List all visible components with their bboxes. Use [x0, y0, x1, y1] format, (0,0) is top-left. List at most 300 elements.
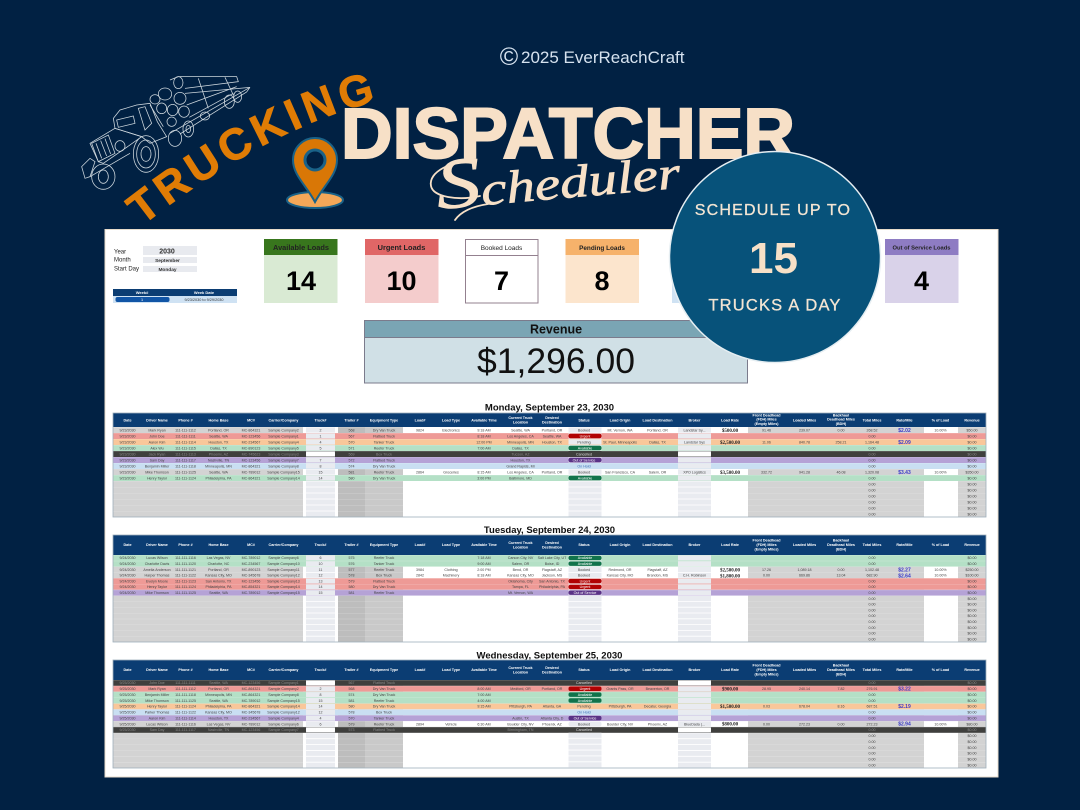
table: Tuesday schedule: Clothing [444, 568, 458, 572]
KPI card: out of service loads: Out of Service Loads [893, 246, 950, 252]
table: Monday schedule: Groceries [443, 470, 459, 474]
table: Monday schedule: Dry Van Truck [373, 464, 395, 468]
table: Tuesday schedule: Las Vegas, NV [207, 556, 231, 560]
table: Monday schedule: Benjamin Miller [145, 464, 170, 468]
table: Monday schedule: Tucson, AZ [511, 452, 530, 456]
table: Wednesday schedule: Vehicle [445, 722, 457, 726]
KPI card: available loads: 14 [286, 266, 316, 296]
table: Monday schedule: Total Miles [863, 418, 881, 422]
table: Wednesday schedule: Sample Company8 [268, 693, 299, 697]
table: Tuesday schedule: 15 [318, 591, 322, 595]
table: Wednesday schedule: Flatbed Truck [373, 728, 395, 732]
table: Monday schedule: $2,500.00 [720, 441, 740, 446]
table: Wednesday schedule: Grants Pass, OR [606, 687, 634, 691]
table: Monday schedule: 10.00% [934, 428, 947, 432]
table: Wednesday schedule: Portland, OR [542, 687, 563, 691]
table: Wednesday schedule: Parker Thomas [145, 711, 169, 715]
table: Tuesday schedule: 111-111-1121 [175, 568, 196, 572]
table: Wednesday schedule: Houston, TX [209, 716, 229, 720]
table: Monday schedule: MC-864321 [242, 476, 260, 480]
table: Wednesday schedule: 8:00 AM [477, 687, 491, 691]
table: Wednesday schedule: Sam Day [150, 728, 165, 732]
table: Wednesday schedule: 276.91 [866, 687, 878, 691]
table: Monday schedule: Rate/Mile [896, 418, 913, 422]
table: Monday schedule: 111-111-1114 [175, 440, 196, 444]
table: Tuesday schedule: $0.00 [968, 562, 976, 566]
table: Monday schedule: 111-111-1113 [175, 452, 196, 456]
table: Wednesday schedule: 4:00 AM [477, 699, 491, 703]
table: Wednesday schedule: Dry Van Truck [373, 687, 395, 691]
table: Monday schedule: 9:18 AM [477, 428, 491, 432]
heading: Scheduler script [431, 124, 684, 225]
table: Wednesday schedule: 0.03 [763, 705, 770, 709]
table: Wednesday schedule: $0.00 [968, 681, 976, 685]
table: Wednesday schedule: Total Miles [863, 668, 881, 672]
table: Tuesday schedule: Rate/Mile [896, 543, 913, 547]
table: Monday schedule: 0.00 [868, 452, 876, 456]
callout: schedule up to 15 trucks a day: SCHEDULE UP TO [695, 202, 851, 219]
table: Wednesday schedule: 0.00 [838, 722, 844, 726]
table: Monday schedule: 9/23/2030 [120, 458, 136, 462]
table: Monday schedule: $0.00 [968, 452, 976, 456]
table: Wednesday schedule: 0.00 [868, 763, 876, 767]
panel: date controls: September [155, 258, 180, 264]
panel: white dashboard sheet [105, 230, 998, 777]
table: Wednesday schedule: 8 [320, 693, 322, 697]
table: Tuesday schedule: Flagstaff, AZ [647, 568, 668, 572]
table: Monday schedule: 239.07 [799, 428, 810, 432]
table: Wednesday schedule: Benjamin Miller [145, 693, 170, 697]
table: Monday schedule: 9/23/2030 [120, 428, 136, 432]
table: Monday schedule: 111-111-1117 [175, 458, 196, 462]
table: Tuesday schedule: MC-789012 [242, 556, 260, 560]
table: Tuesday schedule: 111-111-1116 [175, 556, 196, 560]
table: Tuesday schedule: Philadelphia, PA [539, 585, 566, 589]
table: Monday schedule: Houston, TX [542, 440, 563, 444]
table: Wednesday schedule: 14 [318, 705, 322, 709]
table: Tuesday schedule: $2,500.00 [720, 568, 740, 574]
table: Tuesday schedule: Sample Company13 [267, 579, 300, 583]
table: Monday schedule: 12:00 PM [476, 440, 492, 444]
table: Tuesday schedule: 0.00 [868, 608, 876, 612]
table: Wednesday schedule: 678.04 [799, 705, 810, 709]
table: Monday schedule: Mt. Vernon, WA [607, 428, 633, 432]
table: Monday schedule: 571 [348, 446, 354, 450]
week selector table: 9/23/2030 to 9/29/2030 [184, 298, 224, 302]
table: Monday schedule: 941.28 [799, 470, 810, 474]
table: Monday schedule: 572 [348, 458, 354, 462]
table: Monday schedule: 7 [320, 458, 322, 462]
table: Tuesday schedule: Kansas City, MO [205, 574, 232, 578]
table: Monday schedule: 8:15 AM [477, 470, 491, 474]
panel: date controls [114, 246, 197, 273]
table: Wednesday schedule: Available [578, 699, 592, 703]
table: Wednesday schedule: 6 [320, 722, 322, 726]
table: Monday schedule: Baltimore, MD [509, 476, 532, 480]
table: Monday schedule: Carrier/Company [269, 418, 299, 422]
table: Monday schedule: Los Angeles, CA [507, 470, 534, 474]
table: Wednesday schedule: Philadelphia, PA [205, 705, 232, 709]
table: Wednesday schedule: Seattle, WA [209, 681, 229, 685]
table: Wednesday schedule: Pittsburgh, PA [509, 705, 532, 709]
table: Monday schedule: 1,320.08 [865, 470, 879, 474]
table: Tuesday schedule: 0.00 [868, 597, 876, 601]
table: Wednesday schedule: 111-111-1118 [175, 693, 196, 697]
table: Monday schedule: Truck# [315, 418, 326, 422]
table: Wednesday schedule: Booked [578, 722, 590, 726]
table: Tuesday schedule: 579 [348, 579, 354, 583]
table: Wednesday schedule: 580 [348, 705, 354, 709]
panel: date controls: Year [114, 250, 126, 256]
table: Tuesday schedule: Urgent [580, 585, 590, 589]
table: Monday schedule: Available [578, 476, 592, 480]
table: Wednesday schedule: Home Base [208, 668, 229, 672]
table: Wednesday schedule: 0.00 [868, 681, 876, 685]
KPI card: urgent loads: Urgent Loads [378, 243, 425, 252]
week selector table: Week Date [194, 290, 215, 295]
table title: Wednesday: Wednesday, September 25, 2030 [477, 650, 622, 662]
table: Tuesday schedule: 6 [320, 556, 322, 560]
table: Monday schedule: Portland, OR [542, 470, 563, 474]
table: Wednesday schedule: Box Truck [376, 711, 392, 715]
table: Monday schedule: Booked [578, 428, 590, 432]
table: Tuesday schedule: Tampa, FL [512, 585, 529, 589]
table: Wednesday schedule: $0.00 [968, 734, 976, 738]
table: Wednesday schedule: 578 [348, 711, 354, 715]
table: Wednesday schedule: Load Destination [643, 668, 673, 672]
table: Wednesday schedule: Sample Company4 [268, 716, 299, 720]
table: Monday schedule: Sample Company8 [268, 464, 299, 468]
table: Tuesday schedule: 580 [348, 585, 354, 589]
table: Monday schedule: 569 [348, 452, 354, 456]
table: Monday schedule: MC-890123 [242, 446, 260, 450]
table: Monday schedule: $0.00 [968, 464, 976, 468]
table: Wednesday schedule: $0.00 [968, 687, 976, 691]
KPI card: urgent loads [365, 239, 438, 303]
table: Wednesday schedule: MC-234567 [242, 716, 260, 720]
table: Monday schedule: Trailer # [344, 418, 359, 422]
table: Wednesday schedule: BlueDada (... [684, 722, 705, 726]
table: Wednesday schedule [113, 660, 986, 768]
table: Wednesday schedule: (FDH) Miles [756, 668, 777, 672]
table: Wednesday schedule: Henry Taylor [147, 705, 168, 709]
table: Tuesday schedule: 12 [318, 574, 322, 578]
table: Wednesday schedule: 568 [348, 687, 354, 691]
table: Monday schedule: 0.00 [868, 434, 876, 438]
KPI card: pending loads: Pending Loads [579, 245, 625, 252]
panel: date controls: Month [114, 258, 131, 264]
table: Tuesday schedule: 111-111-1124 [175, 585, 196, 589]
table: Tuesday schedule: 9/24/2030 [120, 579, 136, 583]
KPI card: booked loads: Booked Loads [481, 245, 523, 252]
table: Monday schedule: St. Paul, Minneapolis [603, 440, 637, 444]
table: Monday schedule: 568 [348, 428, 354, 432]
table: Monday schedule: Driver Name [146, 418, 168, 422]
table: Wednesday schedule: $0.00 [968, 711, 976, 715]
table: Monday schedule: Cancelled [576, 452, 592, 456]
table: Monday schedule: 3:00 PM [477, 476, 491, 480]
table: Tuesday schedule: Machinery [443, 574, 459, 578]
table: Monday schedule: Aaron Kim [149, 440, 165, 444]
table: Monday schedule: Sample Company7 [268, 458, 299, 462]
table: Tuesday schedule: 3984 [416, 568, 424, 572]
table: Monday schedule: Load Origin [610, 418, 631, 422]
table: Monday schedule: MC-234567 [242, 440, 260, 444]
heading: TRUCKING: TRUCKING [124, 74, 373, 220]
table: Wednesday schedule: Phoenix, AZ [648, 722, 668, 726]
table: Monday schedule: Dallas, TX [512, 446, 529, 450]
table: Wednesday schedule: Date [124, 668, 132, 672]
table: Monday schedule: 91.46 [762, 428, 771, 432]
table: Monday schedule: MC-745623 [242, 452, 260, 456]
table: Monday schedule: 111-111-1115 [175, 446, 196, 450]
table: Monday schedule: $0.00 [968, 440, 976, 444]
table: Tuesday schedule: Flagstaff, AZ [542, 568, 563, 572]
table: Monday schedule: (FDH) Miles [756, 418, 777, 422]
table: Monday schedule: 9/23/2030 [120, 464, 136, 468]
table: Tuesday schedule: Sample Company11 [267, 568, 300, 572]
KPI card: urgent loads: 10 [386, 266, 417, 296]
copyright line: © [500, 43, 519, 71]
table: Wednesday schedule: 9/25/2030 [120, 722, 136, 726]
table: Wednesday schedule: Reefer Truck [374, 699, 394, 703]
table: Wednesday schedule: 240.14 [799, 687, 810, 691]
table: Tuesday schedule: Reefer Truck [374, 591, 394, 595]
table: Monday schedule: Houston, TX [511, 458, 531, 462]
table: Monday schedule: Seattle, WA [209, 434, 229, 438]
table: Tuesday schedule: Load Type [442, 543, 460, 547]
table: Monday schedule: 2864 [416, 470, 424, 474]
table: Monday schedule: 570 [348, 440, 354, 444]
table: Monday schedule: 11.06 [762, 440, 771, 444]
table: Wednesday schedule: Load Rate [721, 668, 739, 672]
table: Tuesday schedule: Loaded Miles [793, 543, 816, 547]
table: Tuesday schedule: 0.00 [868, 579, 876, 583]
table: Monday schedule: 0.00 [868, 500, 876, 504]
table: Wednesday schedule: Phoenix, AZ [542, 722, 562, 726]
table: Tuesday schedule: Broker [689, 543, 701, 547]
panel: date controls: 2030 [159, 248, 175, 256]
table: Wednesday schedule: Kansas City, MO [205, 711, 232, 715]
table: Monday schedule: $0.00 [968, 458, 976, 462]
table: Monday schedule: Load Rate [721, 418, 739, 422]
table: Wednesday schedule: 7.82 [838, 687, 844, 691]
table: Tuesday schedule: Evelyn Moore [146, 579, 168, 583]
table: Monday schedule: Sample Company14 [267, 476, 300, 480]
table: Monday schedule: Mike Thomson [145, 470, 169, 474]
table: Wednesday schedule: Las Vegas, NV [207, 722, 231, 726]
table: Wednesday schedule: $80.00 [966, 722, 978, 726]
table: Monday schedule: Tanker Truck [374, 440, 394, 444]
table: Monday schedule: 567 [348, 434, 354, 438]
panel: revenue: $1,296.00 [477, 341, 635, 381]
table: Wednesday schedule: Beaverton, OR [646, 687, 670, 691]
table: Monday schedule: Revenue [964, 418, 980, 422]
table: Tuesday schedule: Brandon, MS [647, 574, 669, 578]
table: Tuesday schedule: 0.00 [838, 568, 844, 572]
table: Tuesday schedule: Oklahoma, City [508, 579, 533, 583]
table: Wednesday schedule: Load Type [442, 668, 460, 672]
table: Monday schedule: Sample Company3 [268, 452, 299, 456]
table: Tuesday schedule: $0.00 [968, 620, 976, 624]
table: Tuesday schedule: $0.00 [968, 637, 976, 641]
table: Wednesday schedule: 687.51 [866, 705, 878, 709]
table: Wednesday schedule: Nashville, TN [208, 728, 230, 732]
table: Monday schedule: 8 [320, 464, 322, 468]
table: Tuesday schedule: Lucas Wilson [146, 556, 168, 560]
copyright line [500, 43, 685, 71]
table: Tuesday schedule: 1,102.48 [865, 568, 879, 572]
table: Tuesday schedule: 9:00 AM [477, 562, 491, 566]
table: Wednesday schedule: 0.00 [868, 716, 876, 720]
table: Wednesday schedule: MC-789012 [242, 722, 260, 726]
table: Monday schedule: 332.72 [761, 470, 772, 474]
table: Wednesday schedule: Atlanta City, D [541, 716, 564, 720]
table: Tuesday schedule: (FDH) Miles [756, 543, 777, 547]
table: Wednesday schedule: MC-123456 [242, 728, 260, 732]
table: Tuesday schedule: Out of Service [574, 591, 596, 595]
table: Tuesday schedule: Kansas City, MO [507, 574, 534, 578]
KPI card: out of service loads [885, 239, 958, 303]
table: Tuesday schedule: 7:18 AM [477, 556, 491, 560]
table: Monday schedule: On Hold [577, 464, 591, 468]
table: Wednesday schedule: 9/25/2030 [120, 716, 136, 720]
table: Wednesday schedule: Destination [542, 670, 563, 674]
table: Tuesday schedule: 9/24/2030 [120, 574, 136, 578]
KPI card: pending loads [566, 239, 639, 303]
table: Monday schedule: Reefer Truck [374, 446, 394, 450]
table: Wednesday schedule: Austin, TX [512, 716, 529, 720]
table: Wednesday schedule: Pittsburgh, PA [609, 705, 632, 709]
table: Monday schedule: 2 [320, 428, 322, 432]
table: Tuesday schedule: Carson City, NV [508, 556, 534, 560]
KPI card: booked loads [466, 240, 538, 303]
table: Monday schedule: Sample Company15 [267, 470, 300, 474]
table: Wednesday schedule: Flatbed Truck [373, 681, 395, 685]
table: Wednesday schedule: 581 [348, 699, 354, 703]
table: Wednesday schedule: 111-111-1111 [175, 681, 196, 685]
table: Monday schedule: $50.00 [966, 428, 978, 432]
table: Tuesday schedule: $0.00 [968, 603, 976, 607]
table title: Monday: Monday, September 23, 2030 [485, 402, 614, 414]
table: Wednesday schedule: $0.00 [968, 705, 976, 709]
table: Monday schedule: 8:18 AM [477, 434, 491, 438]
table: Wednesday schedule: Load# [415, 668, 425, 672]
heading: Scheduler script: Scheduler [432, 124, 684, 225]
table: Tuesday schedule: 669.86 [799, 574, 810, 578]
table: Monday schedule: 46.08 [836, 470, 846, 474]
icon: location pin [287, 138, 343, 208]
table: Wednesday schedule: 9/25/2030 [120, 687, 136, 691]
table: Tuesday schedule: Status [578, 543, 590, 547]
table: Wednesday schedule: Boulder City, NV [607, 722, 634, 726]
table: Wednesday schedule: 579 [348, 722, 354, 726]
table: Wednesday schedule: $1,500.00 [720, 705, 740, 710]
table: Tuesday schedule: 10 [318, 562, 322, 566]
table: Tuesday schedule: Philadelphia, PA [205, 585, 232, 589]
table: Monday schedule: $3.43 [898, 470, 911, 476]
table: Monday schedule: 5 [320, 446, 322, 450]
table: Tuesday schedule: $0.00 [968, 579, 976, 583]
table: Wednesday schedule: Sample Company7 [268, 728, 299, 732]
table: Monday schedule: Los Angeles, CA [507, 434, 534, 438]
table: Wednesday schedule: (BDH) [836, 672, 847, 676]
table: Monday schedule: Portland, OR [647, 428, 668, 432]
table: Monday schedule: MC-789012 [242, 470, 260, 474]
table: Monday schedule: Load Destination [643, 418, 673, 422]
panel: date controls: Start Day [114, 266, 139, 272]
table: Wednesday schedule: 570 [348, 716, 354, 720]
table: Monday schedule: $2.02 [898, 428, 911, 434]
table: Tuesday schedule: 0.00 [868, 603, 876, 607]
table: Tuesday schedule: Portland, OR [208, 568, 229, 572]
table: Monday schedule: $3,500.00 [720, 471, 740, 476]
table: Tuesday schedule: Load Rate [721, 543, 739, 547]
table: Tuesday schedule: 0.00 [868, 591, 876, 595]
table: Wednesday schedule: 9/25/2030 [120, 705, 136, 709]
table: Monday schedule: Dry Van Truck [373, 476, 395, 480]
table: Monday schedule: Phone # [178, 418, 193, 422]
table: Wednesday schedule: 8.16 [838, 705, 844, 709]
table: Monday schedule: % of Load [932, 418, 950, 422]
table: Monday schedule: 0.00 [868, 512, 876, 516]
table: Monday schedule: Date [124, 418, 132, 422]
table: Tuesday schedule: 9/24/2030 [120, 591, 136, 595]
table: Wednesday schedule: Cancelled [576, 681, 592, 685]
table: Tuesday schedule: 2:00 PM [477, 568, 491, 572]
table: Tuesday schedule: Bend, OR [513, 568, 529, 572]
table: Tuesday schedule: C.H. Robinson [683, 574, 706, 578]
table: Tuesday schedule: 577 [348, 568, 354, 572]
table: Monday schedule: Portland, OR [208, 428, 229, 432]
table: Tuesday schedule: Box Truck [376, 574, 392, 578]
table: Tuesday schedule: Redmond, OR [609, 568, 632, 572]
table: Tuesday schedule: $0.00 [968, 608, 976, 612]
table: Tuesday schedule: Seattle, WA [209, 591, 229, 595]
table: Wednesday schedule: 9/25/2030 [120, 699, 136, 703]
table: Wednesday schedule: John Doe [149, 681, 165, 685]
table: Monday schedule: Flatbed Truck [373, 458, 395, 462]
table: Tuesday schedule: $0.00 [968, 626, 976, 630]
table: Wednesday schedule: MC-864321 [242, 705, 260, 709]
table: Wednesday schedule: Dry Van Truck [373, 693, 395, 697]
table: Wednesday schedule: 111-111-1124 [175, 705, 196, 709]
table: Monday schedule: Pending [577, 440, 591, 444]
table: Wednesday schedule: 574 [348, 693, 354, 697]
table: Monday schedule: 0.00 [838, 428, 844, 432]
table: Tuesday schedule: Load# [415, 543, 425, 547]
table: Tuesday schedule: (BDH) [836, 548, 847, 552]
table: Wednesday schedule: Reefer Truck [374, 722, 394, 726]
table: Monday schedule: Equipment Type [370, 418, 398, 422]
table: Wednesday schedule: Sample Company14 [267, 705, 300, 709]
table: Tuesday schedule: 9/24/2030 [120, 562, 136, 566]
table: Tuesday schedule: Revenue [964, 543, 980, 547]
table: Tuesday schedule: Sample Company6 [268, 556, 299, 560]
table: Wednesday schedule: Sample Company15 [267, 699, 300, 703]
table: Wednesday schedule: Truck# [315, 668, 326, 672]
table: Wednesday schedule: % of Load [932, 668, 950, 672]
table: Monday schedule: Philadelphia, PA [205, 476, 232, 480]
table: Wednesday schedule: Boulder City, NV [507, 722, 534, 726]
table: Wednesday schedule: 0.00 [868, 746, 876, 750]
table: Monday schedule: Urgent [580, 434, 590, 438]
table: Monday schedule: Sample Company5 [268, 446, 299, 450]
table: Monday schedule: 1,164.48 [865, 440, 879, 444]
table: Tuesday schedule: Booked [578, 574, 590, 578]
table: Wednesday schedule: 6:30 AM [477, 722, 491, 726]
table: Wednesday schedule: Backhaul [833, 664, 849, 668]
